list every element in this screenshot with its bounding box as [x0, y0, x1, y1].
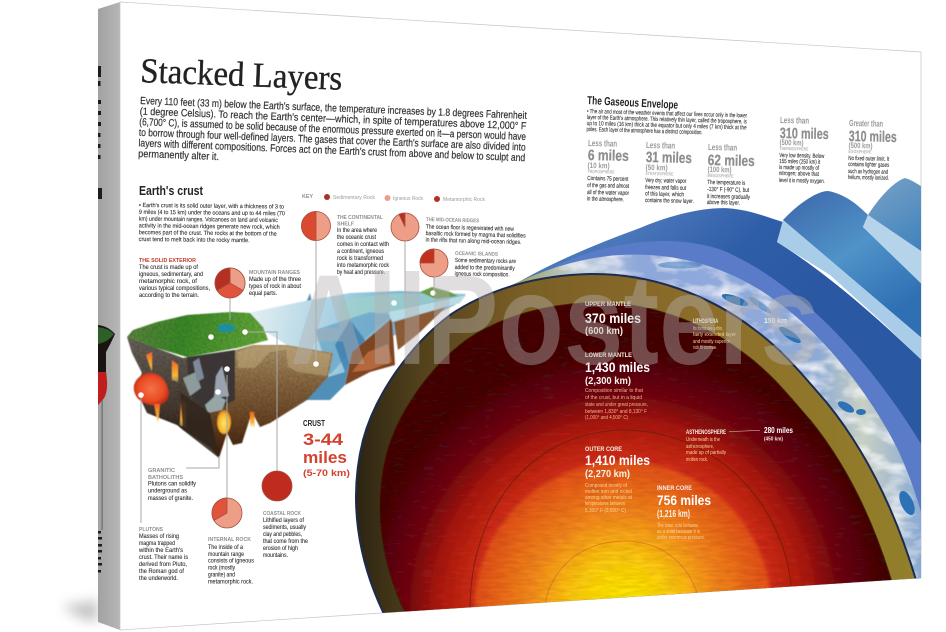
atmosphere column: exosphere: contains lighter gases [848, 162, 889, 169]
label: outer core: temperatures between [585, 501, 625, 507]
atmosphere column: troposphere: Less than [588, 138, 617, 149]
atmosphere column: thermosphere [779, 115, 829, 185]
crust sediments [210, 345, 333, 458]
atmosphere column: stratosphere: contains the snow layer. [645, 198, 694, 205]
atmosphere column: troposphere [587, 138, 630, 203]
label: asthenosphere: asthenosphere, [686, 444, 714, 450]
crust thickness stat: 3-44 [303, 430, 344, 449]
magma flames [146, 352, 255, 428]
text: the solid exterior: THE SOLID EXTERIOR [139, 258, 196, 264]
label: 280 miles [764, 425, 793, 442]
label: inner core: INNER CORE [657, 485, 693, 492]
text: granitic batholiths: Plutons can solidify [148, 482, 196, 488]
text: oceanic islands: added to the predominantly [455, 265, 515, 272]
label: outer core: 6,300° F (3,500° C) [585, 508, 626, 514]
text: granitic batholiths: masses of granite. [148, 496, 193, 502]
label: lower mantle: LOWER MANTLE [585, 352, 633, 359]
atmosphere column: stratosphere [645, 140, 695, 205]
atmosphere column: thermosphere: Very low density. Below [779, 153, 825, 160]
crust paragraph: • Earth's crust is its solid outer layer, with a thickness of 3 to [139, 203, 285, 211]
atmosphere column: stratosphere: of this layer, which [645, 191, 684, 198]
crust paragraph: activity in the mid-ocean ridges generate new rock, which [139, 223, 280, 231]
text: internal rock [208, 537, 254, 586]
label: outer core: among other metals at [585, 495, 632, 501]
lake [217, 324, 235, 332]
pie: oceanic islands [420, 249, 448, 277]
granite intrusion [217, 410, 231, 434]
atmosphere column: mesosphere: (100 km) [707, 165, 732, 175]
atmosphere column: mesosphere: above this layer. [707, 200, 740, 207]
label: lower mantle [585, 352, 650, 421]
label: outer core: molten iron and nickel [585, 489, 632, 495]
atmosphere column: stratosphere: 31 miles [646, 149, 692, 167]
label: upper mantle: 370 miles [585, 310, 641, 326]
atmosphere column: mesosphere: MESOSPHERE [707, 173, 734, 179]
text: coastal rock: COASTAL ROCK [263, 511, 301, 517]
text: mid-ocean ridges: THE MID-OCEAN RIDGES [426, 217, 479, 224]
pie: mountain ranges [215, 268, 245, 298]
text: granitic batholiths: underground as [148, 488, 187, 494]
gaseous envelope paragraph: up to 10 miles (16 km) thick at the equator but only 4 miles (7 km) thick at the [587, 121, 747, 131]
intro paragraph [138, 96, 527, 175]
ocean panes [306, 293, 465, 400]
text: continental shelf: rock is transformed [337, 256, 383, 262]
text: continental shelf: a continent, igneous [337, 249, 384, 255]
intro paragraph: to borrow through four well-defined layers. The gases that cover the Earth's surface are also divided into [139, 128, 526, 154]
label: 280 miles: (450 km) [764, 436, 783, 442]
key legend: Metamorphic Rock [443, 197, 485, 203]
text: mountain ranges: equal parts. [249, 291, 277, 297]
text: oceanic islands [455, 251, 517, 279]
label: upper mantle [585, 301, 641, 337]
atmosphere: light cut face [777, 220, 921, 360]
label: lower mantle: state and under great pressure, [585, 402, 648, 408]
text: continental shelf: SHELF [337, 222, 355, 228]
outer core boundary [470, 430, 792, 610]
crust cross-section illustration [127, 287, 466, 458]
intro paragraph: permanently alter it. [138, 149, 219, 163]
atmosphere column: troposphere: (10 km) [587, 161, 610, 170]
text: internal rock: mountain range [208, 552, 245, 558]
gaseous envelope paragraph: poles. Each layer of the atmosphere has a distinct composition. [586, 127, 703, 136]
atmosphere column: mesosphere: Less than [708, 142, 737, 153]
text: coastal rock [263, 511, 309, 559]
atmosphere column: thermosphere: 155 miles (250 km) it [779, 159, 820, 166]
label: inner core: as a solid because it is [657, 529, 700, 535]
atmosphere column: exosphere [848, 118, 897, 182]
earth surface band [380, 255, 932, 632]
text: the solid exterior: igneous, sedimentary, and [139, 272, 203, 278]
key legend [302, 194, 485, 203]
text: granitic batholiths [148, 468, 196, 502]
internal rock chamber [183, 350, 235, 413]
intro paragraph: (6,700° C), is assumed to be solid because of the enormous pressure exerted on it—a person would have [139, 117, 526, 143]
atmosphere column: stratosphere: Very dry; water vapor [645, 178, 686, 185]
heading: Earth's crust: Earth's crust [139, 184, 204, 198]
label: 280 miles: 280 miles [764, 425, 793, 435]
atmosphere column: troposphere: all of the water vapor [587, 190, 629, 197]
text: internal rock: INTERNAL ROCK [208, 537, 251, 543]
crust paragraph: crust tend to melt back into the rocky mantle. [139, 237, 250, 244]
text: granitic batholiths: GRANITIC [148, 468, 175, 474]
text: plutons: Masses of rising [139, 534, 179, 540]
label: inner core: (1,216 km) [657, 509, 690, 520]
crust thickness stat: miles [303, 448, 347, 467]
atmosphere column: thermosphere: nitrogen; above that [779, 171, 819, 178]
text: coastal rock: mountains. [263, 553, 288, 559]
text: internal rock: consists of igneous [208, 558, 254, 564]
pie: internal rock [212, 498, 242, 528]
label: lithosphere: and mostly superior [693, 339, 730, 345]
atmosphere: outer shell [783, 178, 921, 338]
crust paragraph: becomes part of the crust. The rocks at the bottom of the [139, 230, 277, 238]
text: mid-ocean ridges [425, 217, 526, 246]
key legend: Igneous Rock [393, 196, 423, 202]
text: plutons: PLUTONS [139, 527, 163, 533]
label: lithosphere: fairly extended layer [693, 332, 736, 338]
label: outer core: Composed mostly of [585, 483, 627, 489]
pie: continental shelf [302, 212, 330, 240]
text: mountain ranges: types of rock in about [249, 284, 301, 290]
text: mid-ocean ridges: The ocean floor is regenerated with new [426, 224, 514, 233]
gaseous envelope paragraph [586, 109, 748, 137]
atmosphere: main shell [518, 208, 921, 594]
label: outer core: 1,410 miles [585, 452, 650, 468]
text: mountain ranges [249, 270, 302, 297]
label: 150 km: 150 km [764, 316, 787, 325]
text: mountain ranges: Made up of the three [249, 277, 302, 283]
label: lower mantle: of the crust, but in a liquid [585, 395, 642, 401]
mantle [380, 303, 892, 632]
label: inner core: under enormous pressure. [657, 535, 705, 541]
label: lower mantle: between 1,830° and 8,130° F [585, 409, 648, 415]
label: asthenosphere [686, 429, 760, 463]
label: inner core: 756 miles [657, 492, 711, 508]
atmosphere column: thermosphere: THERMOSPHERE [779, 146, 809, 152]
text: plutons: the underworld. [139, 576, 178, 582]
crust paragraph: 9 miles (4 to 15 km) under the oceans and up to 44 miles (70 [139, 210, 286, 217]
sediment step [237, 346, 331, 376]
canvas spine [98, 2, 120, 630]
atmosphere column: exosphere: Greater than [849, 118, 883, 129]
crust left wall [127, 337, 235, 458]
crust thickness stat: CRUST [303, 419, 325, 428]
text: continental shelf: THE CONTINENTAL [337, 215, 384, 221]
text: internal rock: granite) and [208, 572, 235, 578]
label: lower mantle: (2,300 km) [585, 376, 631, 387]
text: coastal rock: that come from the [263, 539, 309, 545]
text: internal rock: metamorphic rock. [208, 580, 253, 586]
atmosphere column: troposphere: TROPOSPHERE [587, 169, 615, 175]
label: asthenosphere: Underneath is the [686, 437, 720, 443]
pie: mid-ocean ridges [391, 213, 419, 241]
text: mid-ocean ridges: basaltic rock formed by magma that solidifies [426, 231, 526, 240]
text: the solid exterior [139, 258, 210, 299]
text: coastal rock: Lithified layers of [263, 518, 304, 524]
atmosphere column: thermosphere: level it is mostly oxygen. [779, 178, 825, 185]
crust thickness stat: (5-70 km) [303, 468, 350, 479]
text: continental shelf: into metamorphic rock [337, 263, 390, 269]
label: inner core: The inner core behaves [657, 523, 698, 529]
atmosphere column: thermosphere: (500 km) [779, 138, 804, 148]
label: lower mantle: 1,430 miles [585, 359, 650, 375]
label: outer core: OUTER CORE [585, 446, 623, 453]
atmosphere column: stratosphere: Less than [646, 140, 675, 151]
text: the solid exterior: according to the terrain. [139, 293, 199, 299]
label: asthenosphere: molten rock. [686, 457, 708, 463]
text: mid-ocean ridges: in the rifts that run along mid-ocean ridges. [425, 237, 522, 246]
gaseous envelope paragraph: • The air and most of the weather events that affect our lives occur only in the lower [587, 109, 747, 119]
atmosphere column: mesosphere: The temperature is [707, 180, 745, 187]
text: internal rock: rock (mostly [208, 566, 235, 572]
atmosphere column: mesosphere: -130° F (-90° C), but [707, 187, 749, 194]
icon: ocean patches [658, 262, 918, 517]
earth cutaway illustration [356, 178, 936, 632]
atmosphere column: troposphere: 6 miles [588, 147, 629, 165]
atmosphere column: mesosphere: it increases gradually [707, 194, 750, 201]
atmosphere: lower layer [550, 241, 921, 600]
dark magma wedge [180, 392, 219, 458]
atmosphere column: troposphere: Contains 75 percent [587, 176, 629, 183]
label: inner core [657, 485, 711, 541]
key legend: KEY [302, 194, 313, 200]
marker dots [138, 290, 436, 398]
text: coastal rock: clay and pebbles, [263, 532, 302, 538]
text: plutons: crust. Their name is [139, 555, 188, 561]
gaseous envelope paragraph: layer of the Earth's atmosphere. This relatively thin layer, called the troposphere, is [587, 115, 747, 125]
atmosphere column: mesosphere: 62 miles [708, 152, 755, 170]
atmosphere column: troposphere: in the atmosphere. [587, 196, 624, 203]
label: lithosphere: rock to continue. [693, 345, 717, 351]
crust paragraph: km) under mountain ranges. Volcanoes on land and volcanic [139, 217, 278, 224]
label: asthenosphere: made up of partially [686, 450, 726, 456]
text: granitic batholiths: BATHOLITHS [148, 475, 183, 481]
label: outer core: (2,270 km) [585, 469, 630, 480]
ocean crust layers [345, 295, 466, 385]
key legend: Sedimentary Rock [333, 195, 375, 201]
label: lower mantle: Composition similar to that [585, 388, 643, 394]
text: the solid exterior: various typical compositions, [139, 286, 210, 292]
pluton: magma bulge [134, 373, 169, 405]
label: upper mantle: (600 km) [585, 326, 623, 337]
ocean surface [248, 291, 466, 400]
text: oceanic islands: OCEANIC ISLANDS [455, 251, 498, 258]
text: internal rock: The inside of a [208, 545, 244, 551]
atmosphere column: thermosphere: Less than [780, 115, 809, 126]
label: upper mantle: UPPER MANTLE [585, 301, 632, 308]
text: plutons: the Roman god of [139, 569, 184, 575]
heading: the gaseous envelope: The Gaseous Envelope [587, 95, 678, 112]
text: oceanic islands: Some sedimentary rocks are [455, 258, 516, 265]
title: Stacked Layers [140, 51, 343, 98]
text: plutons [138, 527, 188, 582]
text: continental shelf [337, 215, 390, 276]
inner core boundary [544, 540, 698, 602]
crust paragraph [139, 203, 286, 245]
atmosphere column: troposphere: of the gas and almost [587, 183, 629, 190]
crust thickness stat [303, 419, 350, 479]
atmosphere column: stratosphere: STRATOSPHERE [645, 171, 674, 177]
text: the solid exterior: metamorphic rock, of [139, 279, 197, 285]
undersea mountain [297, 293, 317, 325]
text: plutons: derived from Pluto, [139, 562, 187, 568]
text: continental shelf: by heat and pressure. [337, 270, 385, 276]
earth crust layer [356, 274, 916, 632]
volcanic island [420, 287, 458, 299]
pie: coastal rock [262, 471, 292, 501]
intro paragraph: Every 110 feet (33 m) below the Earth's surface, the temperature increases by 1.8 degrees Fahrenheit [140, 96, 527, 122]
leader lines [141, 241, 434, 523]
text: plutons: magma trapped [139, 541, 175, 547]
label: lower mantle: (1,000° and 4,500° C) [585, 415, 628, 421]
text: continental shelf: comes in contact with [337, 242, 389, 248]
watermark: AllPosters [290, 249, 820, 392]
intro paragraph: (1 degree Celsius). To reach the Earth's center—which, in spite of temperatures above 12,000° F [139, 107, 527, 132]
text: coastal rock: erosion of high [263, 546, 298, 552]
canvas drop shadow [62, 600, 98, 622]
atmosphere column: exosphere: (500 km) [848, 141, 873, 151]
text: mountain ranges: MOUNTAIN RANGES [249, 270, 300, 276]
text: oceanic islands: igneous rock composition. [455, 271, 510, 278]
label: lithosphere: Its forms are a thin, [693, 326, 723, 332]
text: plutons: within the Earth's [138, 548, 183, 554]
atmosphere column: thermosphere: 310 miles [780, 125, 829, 143]
label: lithosphere [693, 318, 736, 351]
label: lithosphere: LITHOSPERA [693, 318, 718, 325]
intro paragraph: layers with different compositions. Forces act on the Earth's crust from above and below to sculpt and [138, 138, 526, 164]
atmosphere column: thermosphere: is made up mostly of [779, 165, 819, 172]
atmosphere column: exosphere: EXOSPHERE [848, 149, 872, 154]
surface of continent [127, 312, 268, 357]
atmosphere column: exosphere: helium, mostly ionized. [848, 175, 889, 182]
atmosphere column: mesosphere [707, 142, 755, 207]
atmosphere column: stratosphere: (50 km) [645, 163, 668, 172]
label: outer core [585, 446, 650, 514]
atmosphere column: exosphere: 310 miles [849, 128, 897, 146]
label: asthenosphere: ASTHENOSPHERE [686, 429, 726, 436]
text: continental shelf: In the area where [337, 228, 378, 234]
text: coastal rock: sediments, usually [263, 525, 306, 531]
text: continental shelf: the oceanic crust [337, 235, 376, 241]
text: the solid exterior: The crust is made up of [139, 265, 198, 271]
atmosphere column: exosphere: such as hydrogen and [848, 169, 888, 176]
atmosphere column: exosphere: No fixed outer limit. It [848, 156, 890, 163]
atmosphere column: stratosphere: freezes and falls out [645, 185, 686, 192]
